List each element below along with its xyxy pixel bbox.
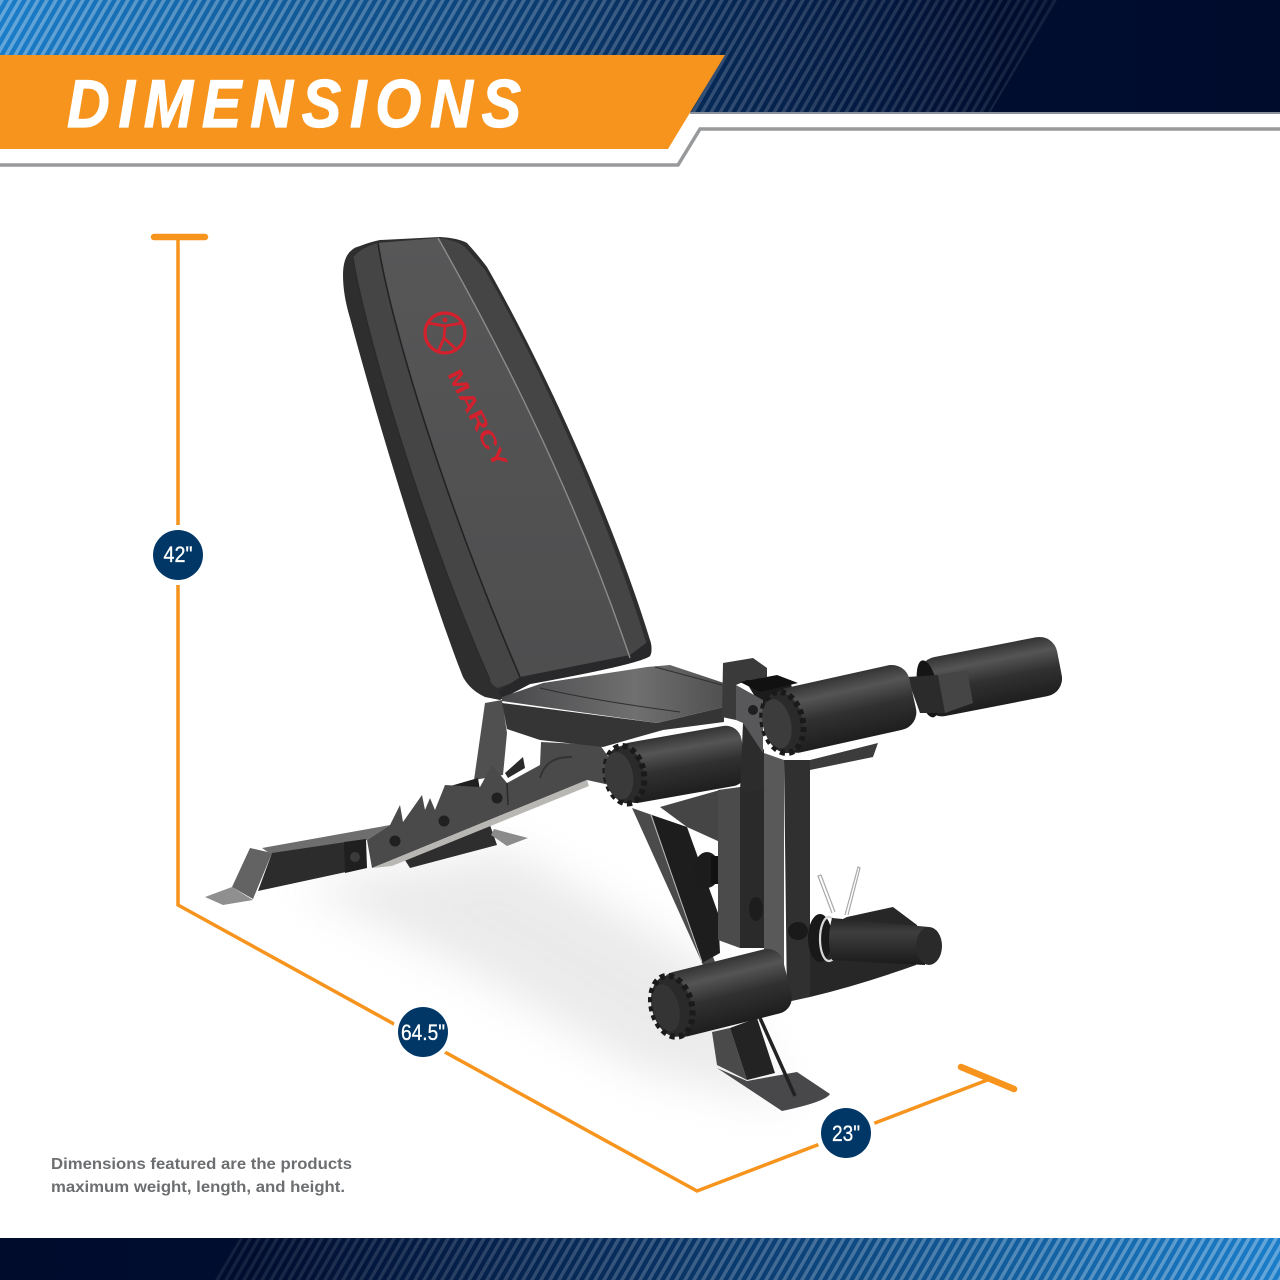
main rail bbox=[367, 742, 632, 868]
footnote bbox=[51, 1156, 352, 1196]
length marker bbox=[393, 1002, 453, 1062]
front strut bbox=[632, 790, 775, 1080]
heading banner bbox=[0, 55, 725, 149]
footnote: maximum weight, length, and height. bbox=[51, 1179, 345, 1196]
back pad bbox=[343, 237, 652, 700]
seat pad bbox=[502, 665, 724, 747]
rear frame bbox=[205, 825, 528, 905]
seat support post bbox=[474, 700, 507, 780]
weight horn bbox=[788, 867, 942, 965]
front column bbox=[736, 685, 810, 1002]
width value: 23" bbox=[832, 1121, 860, 1146]
height value: 42" bbox=[164, 542, 192, 567]
logo: Marcy emblem bbox=[425, 313, 465, 353]
heading: Dimensions: DIMENSIONS bbox=[67, 65, 521, 142]
front foot plate bbox=[717, 1068, 830, 1111]
height marker bbox=[148, 525, 208, 585]
upper right roller bbox=[756, 661, 920, 759]
square tube bbox=[907, 670, 973, 713]
bench bbox=[205, 237, 1065, 1111]
spring clip pins bbox=[818, 867, 860, 915]
adjustment knob bbox=[694, 852, 720, 888]
header outline stroke bbox=[0, 129, 1280, 165]
pull pin bbox=[760, 1018, 795, 1096]
lower left roller bbox=[644, 945, 795, 1043]
lower rear roller bbox=[810, 907, 919, 997]
length value: 64.5" bbox=[401, 1020, 445, 1045]
floor shadow bbox=[300, 850, 790, 1105]
width marker bbox=[816, 1103, 876, 1163]
footnote: Dimensions featured are the products bbox=[51, 1156, 352, 1173]
footer band bbox=[0, 1238, 1280, 1280]
upper left roller bbox=[600, 723, 749, 808]
logo: Marcy wordmark: MARCY bbox=[443, 366, 512, 472]
dimension lines bbox=[154, 237, 1014, 1191]
crossbar behind front rollers bbox=[810, 743, 878, 770]
rear ratchet bbox=[505, 757, 525, 778]
back roller bbox=[912, 634, 1065, 720]
header band bbox=[0, 0, 1280, 114]
upper column bbox=[718, 658, 798, 948]
